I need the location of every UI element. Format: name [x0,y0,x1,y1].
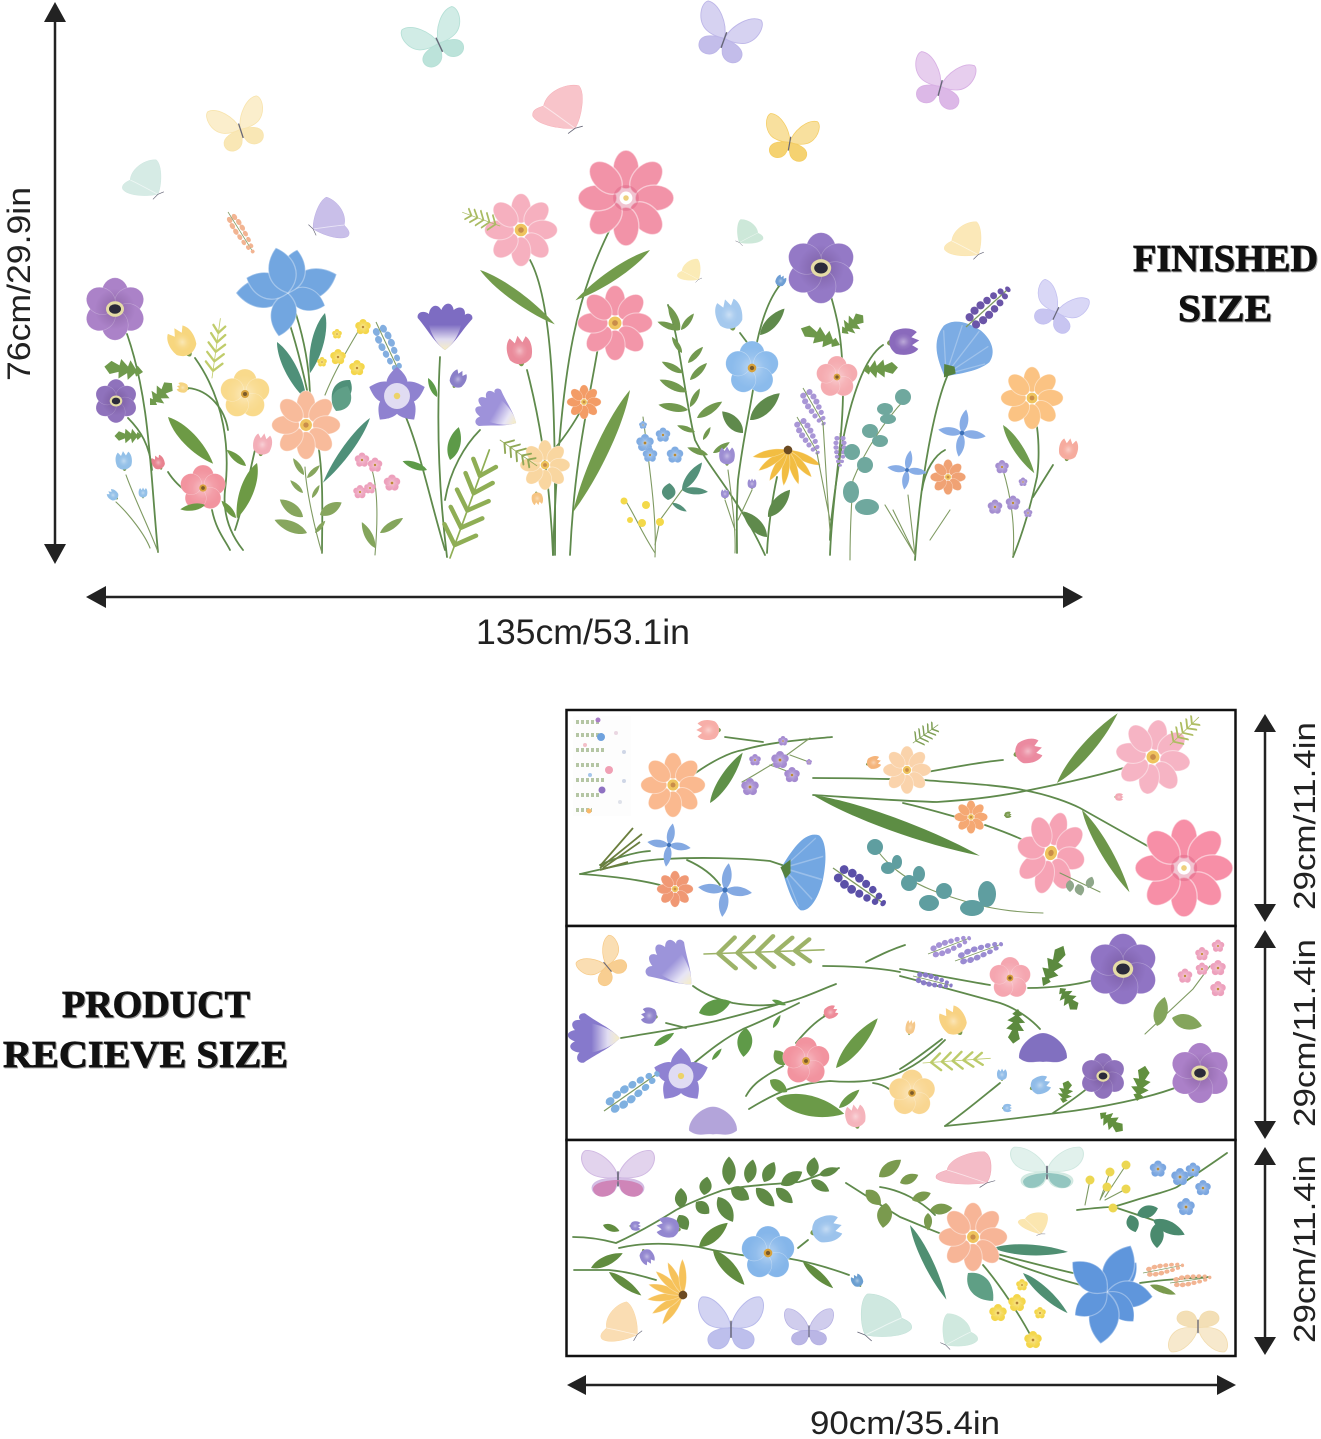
arrow: sheet 2 height [1254,930,1276,1139]
flower: yellow peach [520,440,570,490]
sprig: purple blossoms [740,736,812,797]
flower: purple small anemone [1078,1053,1128,1099]
flower: peach dahlia [272,391,340,459]
leaves: long central blades [477,246,653,515]
butterfly: pink violet [906,51,978,114]
leaves: blue flower stem [718,305,795,541]
stems: sheet 2 [621,945,1180,1126]
flower: purple anemone right [1168,1043,1232,1103]
flower: violet star [651,1048,711,1105]
heading: finished size: FINISHED [1133,238,1318,280]
flower: coral [657,871,693,907]
leaf: dark green [705,750,747,806]
flower: yellow tulip [935,1002,972,1041]
label: sheet 2 height: 29cm/11.4in [1287,939,1321,1127]
flower: orange coral [930,459,966,495]
fern: top pink flower [460,205,503,233]
butterfly: right lilac [1025,278,1091,339]
flower: purple anemone [1085,934,1161,1004]
butterfly: tiny yellow [677,259,702,282]
butterfly: cream [205,95,273,156]
bud: yellow [176,381,190,394]
arrow: finished height [44,2,66,564]
sprigs: green leaves under peach flower [273,457,344,553]
leaves: teal blades [272,312,374,485]
lavender: purple upper [925,931,973,961]
flower: orange large [1001,367,1063,429]
butterfly: yellow [574,934,635,993]
flower: coral tulip [696,720,721,740]
bud: red tulip [149,453,167,472]
flower: purple bell [637,930,709,1002]
label: sheet 3 height: 29cm/11.4in [1287,1155,1321,1343]
sprig: pink blossoms [352,452,401,555]
sprig: blue blossoms [1149,1160,1212,1217]
leaf: peach sprig [1149,1282,1177,1298]
eucalyptus: teal [867,839,1043,916]
stems: sheet 1 [580,737,1160,885]
grass: thin blades [885,495,950,555]
fern: yellow green [204,317,229,379]
flower: large pink cosmos [1135,819,1233,917]
flower: blue morning glory [773,829,832,913]
flower: large pink cosmos [578,150,674,246]
heading: finished size [1133,238,1318,330]
sheet 2 border [566,926,1236,1140]
sprig: pink blossoms [1145,940,1227,1034]
flower: purple bell [418,304,472,350]
panel: sheet 2 [566,926,1236,1140]
flower: light pink cosmos [485,194,557,266]
bud: yellow [904,1019,916,1036]
label: sheet 1 height: 29cm/11.4in [1287,722,1321,910]
flower: small orange [567,385,601,419]
fern: behind peach [908,719,943,749]
arrow: sheet 3 height [1254,1147,1276,1355]
flower: blue tulip [807,1212,845,1246]
sprig: yellow buttercups [317,319,372,395]
sprig: yellow buttercups [988,1279,1047,1350]
flower: blue stars [884,405,990,493]
lavender: peach sprig [223,209,259,256]
flower: blue morning glory [919,312,1001,394]
lavender: blue sprig [368,318,409,379]
leaves: blue sprig [1124,1202,1187,1248]
flower: tiny blue bells [105,450,158,552]
flower: pink tulip [1011,736,1045,767]
sprig: yellow dots [620,498,664,553]
butterfly: small mint [940,1314,978,1349]
butterfly: lilac [688,0,764,69]
sprig: purple blossoms [987,460,1033,556]
stems: right flowers [737,285,1053,560]
sheet 3 border [566,1140,1236,1356]
butterfly: mint [399,5,474,74]
bud: pink [251,432,274,458]
flower: orange star [954,800,988,834]
butterfly: tiny yellow [1016,1206,1052,1238]
butterfly: violet [306,195,358,246]
flower: coral hibiscus [780,1037,832,1087]
flower: peach [883,746,931,794]
label: finished width: 135cm/53.1in [476,613,690,652]
flower: yellow rayed daisy [746,437,824,494]
leaves: upper sprig [862,1155,953,1230]
heading: product receive size: PRODUCT [62,984,250,1026]
sprig: small blue blossoms [635,417,684,557]
sheet 1 border [566,710,1236,926]
flower: violet bell left [568,1013,620,1063]
flower: lilac bell [467,382,527,441]
flower: dark purple tulip [886,327,920,356]
flower: blue forget-me-not [738,1226,798,1282]
grass: sheet 1 [600,828,642,870]
lavender: peach [1142,1259,1212,1289]
bud: peach [530,491,544,506]
flower: pink poppy [987,957,1033,1001]
lavender: centre right [790,384,847,530]
flower: blue forget-me-not [722,341,782,397]
leaf: right green [999,422,1038,476]
leaf: teal oval [327,382,356,415]
label: finished height: 76cm/29.9in [1,187,37,381]
flower: dark purple dome [1019,1033,1067,1062]
leaves: serrated pair [103,357,178,443]
flower: pink cosmos tall [1110,714,1196,800]
leaves: lower left [163,412,263,521]
flower: pink poppy [814,356,860,400]
shell: purple [689,1107,737,1135]
flower: blue tulip [712,296,746,334]
flower: orange cosmos [641,753,705,817]
panel: sheet 1 [566,709,1236,926]
flower: coral hibiscus [178,465,228,513]
butterfly: pale mint [122,160,164,199]
butterfly: cream [1168,1311,1228,1352]
butterfly: lilac [698,1297,764,1349]
butterfly: pink [531,80,588,135]
flower: pale yellow [886,1070,938,1118]
leaf: long green [811,789,982,862]
butterfly: mint wide [1011,1147,1083,1188]
flower: peach dahlia [939,1203,1007,1271]
bud: purple [446,367,469,392]
heading: product receive size [3,984,288,1076]
leaf: teal oval [960,1266,1001,1308]
leaves: green on bell stems [401,377,465,473]
flower: pale yellow [218,369,272,421]
lavender: blue [598,1064,665,1119]
flower: pink bud [844,1103,868,1131]
leaves: pink sprig [358,515,405,550]
stems: sheet 3 [573,1153,1227,1340]
fern: upper right [1164,711,1205,751]
bud: purple [640,1006,659,1025]
flowers: small purple bells [629,1216,683,1267]
butterfly: mint [857,1294,912,1341]
butterfly: peach small [594,1300,644,1349]
arrow: finished width [86,586,1083,608]
lavender: dark [827,859,892,914]
fern: olive [434,444,505,564]
sprig: long green leaves [674,1156,840,1233]
bud: blue [849,1272,866,1290]
butterfly: small yellow [944,222,984,259]
flowers: small purple bells [719,446,756,553]
butterfly: violet small [784,1309,834,1345]
leaves: teal blades [906,1223,1071,1317]
arrow: sheet width [567,1375,1236,1395]
fern: upper [703,934,824,969]
butterfly: yellow [761,113,820,164]
lavender: dark purple [959,280,1017,335]
arrow: sheet 1 height [1254,714,1276,922]
panel: sheet 3 [566,1140,1236,1356]
butterfly: pink shell [936,1152,995,1187]
leaves: serrated lower [1056,1064,1154,1137]
bud: blue [773,273,788,289]
leaf: top blade [1052,709,1122,787]
flower: violet star [366,367,428,426]
flower: pink cosmos [578,286,652,360]
leaves: blue sprig [655,460,708,545]
heading: product receive size: RECIEVE SIZE [3,1034,288,1076]
flower: pink tulip [505,334,534,368]
bud: green tip [1003,811,1012,819]
sprig: tall green leaves [656,304,765,555]
stems: centre flowers [527,225,612,555]
bud: peach orange [864,755,883,771]
leaves: pink sprig [1150,995,1204,1033]
flower: purple anemone right [783,233,859,303]
panel: finished size artwork [81,0,1091,564]
thumbnail: finished layout preview [573,716,631,816]
flower: small purple anemone [92,379,140,423]
lavender: purple mid [953,937,1005,968]
bud: pink [821,1003,840,1021]
leaves: serrated dark [1004,942,1083,1045]
eucalyptus: teal [843,389,911,560]
butterflies: top row [122,0,1091,339]
flower: blue blades [644,820,756,921]
stems: left flowers [127,305,480,557]
heading: finished size: SIZE [1178,288,1272,330]
butterfly: pink purple [582,1150,654,1197]
bud: pink right [1057,437,1080,463]
flower: yellow tulip [163,322,202,363]
leaves: lower stem [589,1218,836,1299]
bud: pink [1114,793,1124,801]
flower: pink cosmos mid [1007,804,1095,902]
flower: small blue bells [997,1069,1053,1112]
flower: large purple anemone [81,278,149,340]
flower: blue lily [236,244,342,339]
leaf: right blade [1077,807,1134,895]
flower: blue lily [1064,1239,1154,1345]
sprig: yellow dots [1085,1160,1130,1212]
butterfly: small mint [735,220,763,246]
leaves: left stems [652,994,787,1061]
lavender: purple low [911,970,954,992]
fern: yellow green [922,1050,991,1071]
fern: small olive [496,434,541,472]
sprig: small grey green [1060,873,1100,897]
leaves: coral flower [767,1014,883,1124]
leaves: serrated near purple [797,308,899,379]
flower: yellow rayed daisy [635,1249,701,1330]
